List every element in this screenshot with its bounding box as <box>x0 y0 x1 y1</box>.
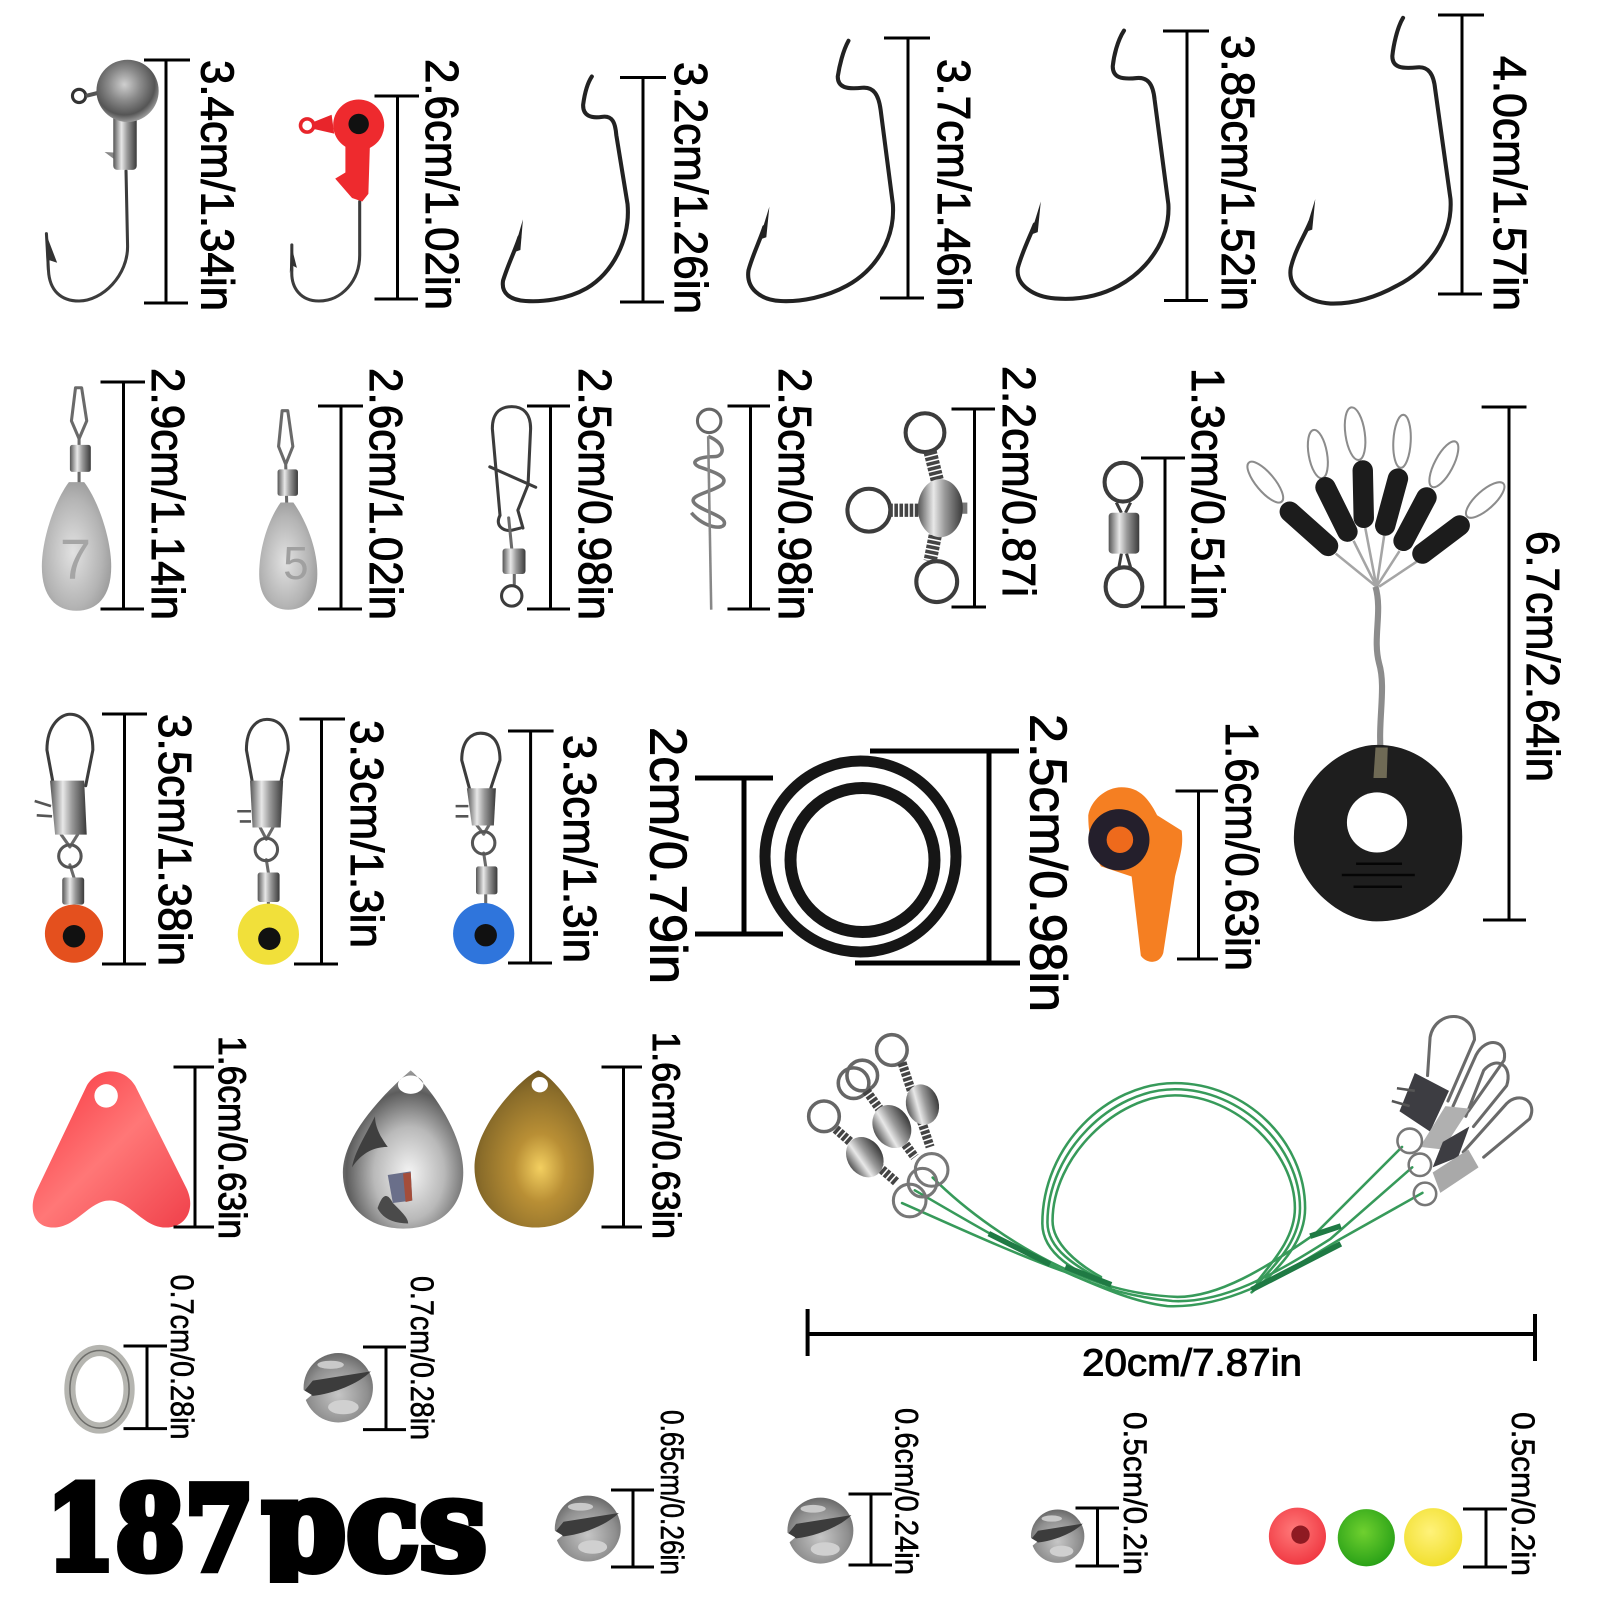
icon: red triangle blade <box>33 1071 190 1228</box>
title: 187pcs: pcs <box>262 1451 487 1599</box>
dimension: 1.6cm/0.63in triangle blade <box>174 1036 253 1239</box>
dimension: 3.3cm/1.3in right <box>508 731 606 963</box>
icon: split ring <box>70 1351 129 1428</box>
left barrel swivels <box>809 1035 948 1217</box>
dimension: 3.85cm/1.52in <box>1163 31 1264 311</box>
artwork row 4: spinner blades <box>33 1070 1462 1566</box>
dimension: 1.6cm/0.63in teardrop blades <box>602 1032 687 1239</box>
dimension: 2.5cm/0.98in snap <box>527 368 621 620</box>
icon: teardrop sinker 5: 5 <box>283 537 309 589</box>
icon: three-way swivel <box>847 413 967 602</box>
dimension: 3.3cm/1.3in right: 3.3cm/1.3in <box>554 735 606 963</box>
dimension: 2.9cm/1.14in <box>100 368 194 620</box>
dimension: 4.0cm/1.57in: 4.0cm/1.57in <box>1484 56 1536 311</box>
dimension: 0.5cm/0.2in beads <box>1463 1412 1541 1576</box>
icon: red bead <box>1269 1508 1326 1565</box>
dimension: 1.6cm/0.63in teardrop blades: 1.6cm/0.63in <box>644 1032 687 1239</box>
icon: offset worm hook 3.85cm <box>1018 31 1168 299</box>
dimension: 3.7cm/1.46in: 3.7cm/1.46in <box>928 59 980 311</box>
icon: corkscrew spring <box>691 409 724 610</box>
dimension: 1.6cm/0.63in triangle blade: 1.6cm/0.63in <box>210 1036 253 1239</box>
dimension: 0.7cm/0.28in ring: 0.7cm/0.28in <box>164 1274 200 1440</box>
dimension: 2.5cm/0.98in ring: 2.5cm/0.98in <box>1019 714 1077 1012</box>
dimension: 3.4cm/1.34in: 3.4cm/1.34in <box>192 60 244 311</box>
icon: offset worm hook 3.7cm <box>748 41 893 301</box>
icon: split shot 0.5cm <box>1029 1510 1084 1563</box>
title: 187pcs: 187 <box>46 1462 254 1597</box>
dimension: 20cm/7.87in leader length <box>808 1309 1535 1384</box>
dimension: 2.6cm/1.02in sinker <box>318 368 412 620</box>
dimension: 3.2cm/1.26in <box>620 62 717 314</box>
icon: outer o-ring <box>765 761 956 952</box>
icon: silver ball jig <box>45 60 159 301</box>
icon: red ball jig <box>290 99 384 301</box>
icon: green wire leaders <box>809 1017 1532 1306</box>
dimension: 2.5cm/0.98in spring: 2.5cm/0.98in <box>769 368 821 620</box>
dimension: 4.0cm/1.57in <box>1438 15 1536 311</box>
icon: silver teardrop blade <box>343 1070 463 1229</box>
dimension: 2.5cm/0.98in spring <box>728 368 821 620</box>
dimension: 1.3cm/0.51in <box>1141 368 1234 620</box>
wires <box>902 1083 1422 1306</box>
dimension: 3.85cm/1.52in: 3.85cm/1.52in <box>1212 35 1264 311</box>
dimension: 2.2cm/0.87in: 2.2cm/0.87i <box>993 366 1045 597</box>
right snaps <box>1392 1017 1532 1205</box>
title: 187pcs <box>54 1479 486 1583</box>
icon: teardrop sinker 7 <box>42 388 111 611</box>
dimension: 2.6cm/1.02in sinker: 2.6cm/1.02in <box>360 368 412 620</box>
icon: gold teardrop blade <box>474 1070 594 1228</box>
dimension: 3.3cm/1.3in middle: 3.3cm/1.3in <box>341 720 393 948</box>
dimension: 3.5cm/1.38in: 3.5cm/1.38in <box>149 714 201 966</box>
dimension: 0.5cm/0.2in shot: 0.5cm/0.2in <box>1117 1412 1153 1575</box>
icon: split shot 0.7cm <box>302 1353 373 1422</box>
artwork row 3: bead snaps, o-rings, bobber <box>35 714 514 965</box>
dimension: 0.5cm/0.2in shot <box>1076 1412 1153 1575</box>
icon: split shot 0.6cm <box>786 1498 853 1564</box>
artwork row 2: sinkers and swivels <box>42 388 1510 921</box>
dimension: 6.7cm/2.64in <box>1482 407 1569 920</box>
dimension: 0.5cm/0.2in beads: 0.5cm/0.2in <box>1505 1412 1541 1576</box>
dimension: 3.3cm/1.3in middle <box>294 719 393 964</box>
icon: orange slip bobber <box>1088 787 1182 962</box>
artwork row 1: jig heads and hooks <box>45 18 1451 304</box>
dimension: 3.4cm/1.34in <box>144 60 244 311</box>
dimension: 0.65cm/0.26in <box>611 1410 690 1575</box>
icon: yellow bead snap <box>237 719 299 965</box>
dimension: 2.9cm/1.14in: 2.9cm/1.14in <box>142 368 194 620</box>
dimension: 1.6cm/0.63in bobber <box>1176 722 1268 971</box>
icon: inner o-ring <box>790 788 934 932</box>
dimension: 2.5cm/0.98in snap: 2.5cm/0.98in <box>569 368 621 620</box>
dimension: 2.6cm/1.02in jig <box>374 59 468 310</box>
dimension: 2.2cm/0.87in <box>952 366 1045 607</box>
dimension: 2cm/0.79in <box>638 727 783 984</box>
icon: green bead <box>1338 1509 1395 1566</box>
icon: teardrop sinker 7: 7 <box>60 528 91 591</box>
dimension: 1.6cm/0.63in bobber: 1.6cm/0.63in <box>1216 722 1268 971</box>
icon: bobber stopper with six beads and disc <box>1242 406 1510 921</box>
dimension: 20cm/7.87in leader length: 20cm/7.87in <box>1082 1342 1302 1384</box>
dimension: 0.6cm/0.24in <box>848 1408 924 1575</box>
dimension: 0.6cm/0.24in: 0.6cm/0.24in <box>888 1408 924 1575</box>
dimension: 0.7cm/0.28in shot <box>363 1276 440 1440</box>
dimension: 0.7cm/0.28in shot: 0.7cm/0.28in <box>404 1276 440 1440</box>
dimension: 3.7cm/1.46in <box>880 38 980 311</box>
icon: orange bead snap <box>35 714 103 963</box>
icon: duo-lock snap swivel <box>490 407 536 606</box>
icon: rolling swivel <box>1105 463 1142 606</box>
icon: offset worm hook 4.0cm <box>1290 18 1451 304</box>
dimension: 3.5cm/1.38in <box>102 714 201 966</box>
dimension: 2cm/0.79in: 2cm/0.79in <box>638 727 696 984</box>
icon: offset worm hook 3.2cm <box>503 77 628 301</box>
icon: split shot 0.65cm <box>553 1496 621 1562</box>
dimension: 3.2cm/1.26in: 3.2cm/1.26in <box>665 62 717 314</box>
dimension: 0.7cm/0.28in ring <box>124 1274 200 1440</box>
dimension: 2.6cm/1.02in jig: 2.6cm/1.02in <box>416 59 468 310</box>
dimension: 1.3cm/0.51in: 1.3cm/0.51in <box>1182 368 1234 620</box>
icon: teardrop sinker 5 <box>259 411 317 610</box>
icon: yellow bead <box>1404 1508 1462 1566</box>
dimension: 2.5cm/0.98in ring <box>855 714 1077 1012</box>
icon: blue bead snap <box>453 733 514 964</box>
dimension: 6.7cm/2.64in: 6.7cm/2.64in <box>1517 531 1569 782</box>
